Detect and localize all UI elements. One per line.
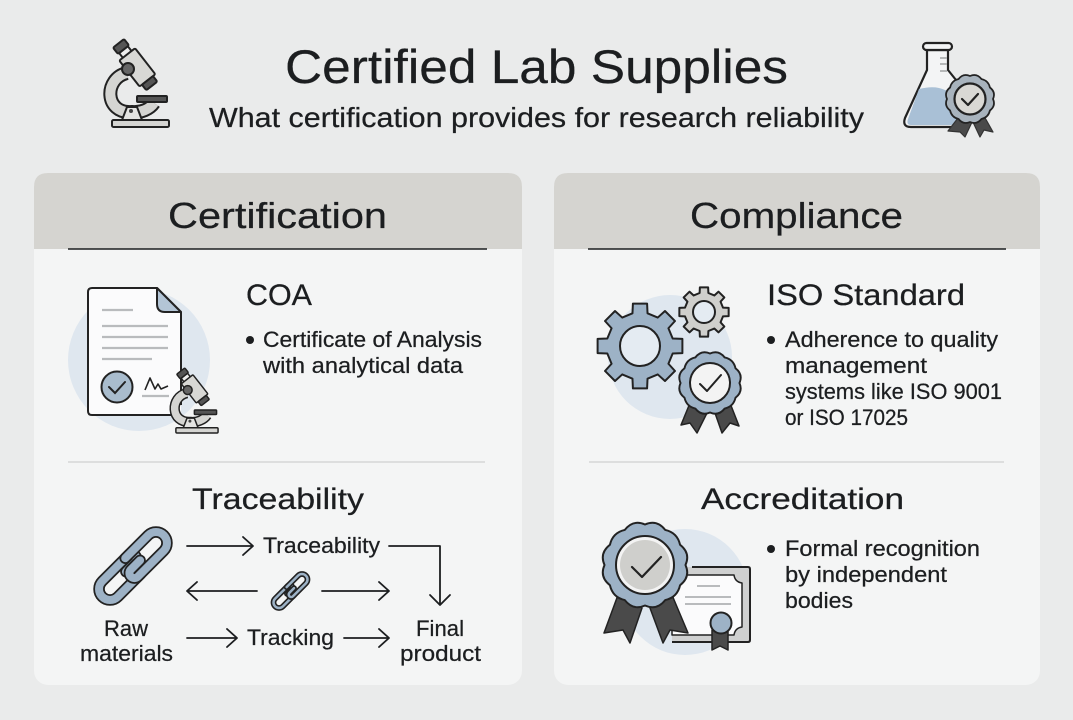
icon: gears with badge (598, 287, 741, 433)
panel header: compliance (554, 173, 1040, 249)
flow label: raw materials: Raw (104, 616, 148, 641)
bullet text: ISO standard: or ISO 17025 (785, 405, 908, 430)
panel header: certification (34, 173, 522, 249)
panel: compliance (554, 173, 1040, 685)
flow label: raw materials: materials (80, 641, 173, 666)
icon: flask with badge (904, 43, 994, 137)
bullet text: accreditation (767, 536, 980, 613)
flow label: raw materials (80, 616, 173, 666)
bullet text: COA: Certificate of Analysis (263, 327, 482, 352)
title: Certified Lab Supplies (285, 40, 788, 93)
flow label: final product: Final (416, 616, 464, 641)
icon: small chain link (271, 572, 310, 610)
icon: rosette and certificate (603, 523, 750, 655)
bullet text: ISO standard: systems like ISO 9001 (785, 379, 1002, 404)
icon: microscope (110, 37, 169, 127)
icon: large chain link (94, 527, 172, 605)
arrows: traceability flow (187, 537, 450, 647)
heading: certification: Certification (168, 195, 387, 236)
icon: certificate document with microscope (68, 288, 218, 433)
subtitle: What certification provides for research reliability (209, 102, 864, 133)
bullet text: accreditation: Formal recognition (785, 536, 980, 561)
bullet text: accreditation: bodies (785, 588, 853, 613)
bullet text: COA: with analytical data (262, 353, 464, 378)
bullet text: COA (246, 327, 482, 378)
bullet text: accreditation: by independent (785, 562, 947, 587)
flow label: final product: product (400, 641, 481, 666)
subheading: accreditation: Accreditation (701, 483, 904, 516)
flow label: tracking: Tracking (247, 625, 334, 650)
flow label: final product (400, 616, 481, 666)
heading: compliance: Compliance (690, 195, 903, 236)
panel body: compliance (554, 173, 1040, 685)
panel body: certification (34, 173, 522, 685)
bullet text: ISO standard: Adherence to quality (785, 327, 998, 352)
panel: certification (34, 173, 522, 685)
bullet text: ISO standard: management (785, 353, 927, 378)
flow label: traceability: Traceability (263, 533, 380, 558)
subheading: ISO standard: ISO Standard (767, 279, 965, 312)
subheading: COA: COA (246, 279, 312, 312)
bullet text: ISO standard (767, 327, 1002, 430)
subheading: traceability: Traceability (192, 483, 364, 516)
